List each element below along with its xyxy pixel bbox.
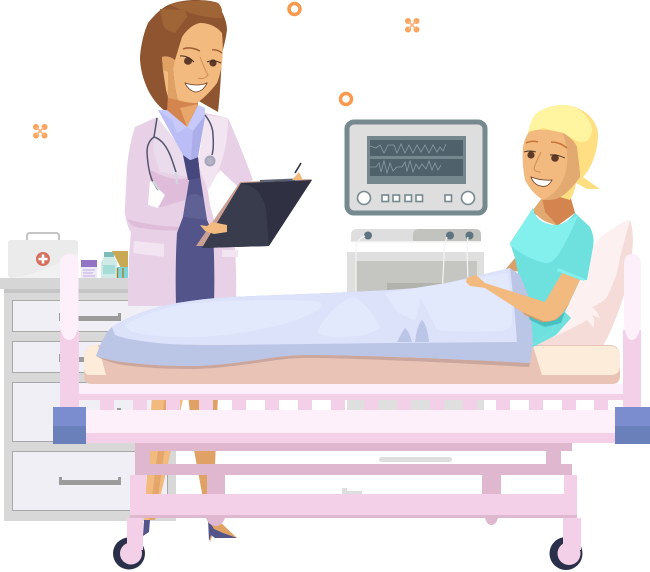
- decoration: orange ring top: [289, 4, 300, 14]
- drawer 3: [12, 382, 168, 442]
- drawer 1: [12, 300, 168, 332]
- patient arm back: [505, 258, 522, 272]
- right rail post: [623, 330, 641, 410]
- drawer 4: [12, 452, 168, 510]
- coat gap right: [208, 172, 236, 220]
- doctor dress: [176, 155, 214, 306]
- coat pockets: [133, 241, 164, 257]
- doctor hair: [140, 0, 227, 113]
- wheel left: [113, 518, 145, 570]
- doctor neck: [167, 95, 198, 127]
- coat sleeve: [125, 206, 201, 231]
- patient eyes and brows: [524, 141, 567, 172]
- mattress: [84, 345, 620, 384]
- coat shade: [150, 170, 190, 208]
- patient shirt: [510, 208, 594, 345]
- patient body: [505, 195, 594, 345]
- coat lapel: [153, 117, 193, 178]
- doctor shirt: [158, 107, 205, 160]
- medicine box: [81, 260, 97, 278]
- coat gaps: [148, 180, 165, 208]
- patient smile: [531, 177, 552, 186]
- doctor coat: [125, 113, 253, 306]
- drawer 2: [12, 342, 168, 372]
- doctor neck front: [180, 104, 198, 127]
- first aid kit: [8, 233, 78, 278]
- scarf highlight: [528, 105, 592, 142]
- gold container: [112, 251, 128, 278]
- blanket shadow: [96, 355, 530, 369]
- undercarriage details: [379, 457, 452, 462]
- doctor hair highlights: [160, 9, 187, 33]
- drawer handles: [59, 313, 121, 485]
- clipboard: [196, 178, 312, 248]
- decoration: orange cross top: [405, 18, 420, 32]
- blanket folds: [397, 320, 429, 342]
- blanket dark band: [96, 268, 533, 366]
- monitor knobs and buttons: [358, 192, 474, 204]
- doctor eyes and brows: [180, 48, 222, 79]
- blanket light ellipse: [125, 300, 321, 337]
- monitor screen: [367, 136, 466, 184]
- monitor stand: [347, 229, 484, 412]
- blanket mid tone: [112, 268, 517, 345]
- doctor hands and pen: [200, 163, 303, 234]
- bed rail posts: [60, 254, 641, 410]
- wheel right: [550, 518, 582, 570]
- patient face: [523, 130, 580, 200]
- cabinet: [0, 278, 176, 521]
- blanket: [96, 268, 533, 369]
- doctor face: [162, 23, 223, 103]
- patient scarf: [528, 105, 600, 200]
- blanket light patch: [317, 297, 380, 337]
- blanket light upper right: [385, 273, 512, 332]
- decoration: orange ring middle: [340, 94, 352, 104]
- pillow: [533, 220, 633, 346]
- doctor smile: [185, 83, 207, 92]
- patient monitor: [347, 122, 485, 213]
- left rail post: [60, 330, 79, 410]
- medicine bottle: [101, 252, 117, 278]
- patient head: [523, 105, 600, 200]
- doctor: [125, 0, 312, 306]
- bed side rail: [79, 384, 623, 443]
- blue corner block right: [615, 407, 650, 444]
- base frame: [130, 475, 577, 516]
- bed undercarriage: [130, 443, 577, 526]
- patient neck: [533, 195, 575, 226]
- decoration: orange cross left: [33, 124, 48, 138]
- patient arm over blanket: [466, 268, 585, 347]
- blue corner block left: [53, 407, 86, 444]
- doctor legs: [143, 395, 237, 542]
- stethoscope: [147, 115, 214, 190]
- rail slats: [100, 400, 608, 411]
